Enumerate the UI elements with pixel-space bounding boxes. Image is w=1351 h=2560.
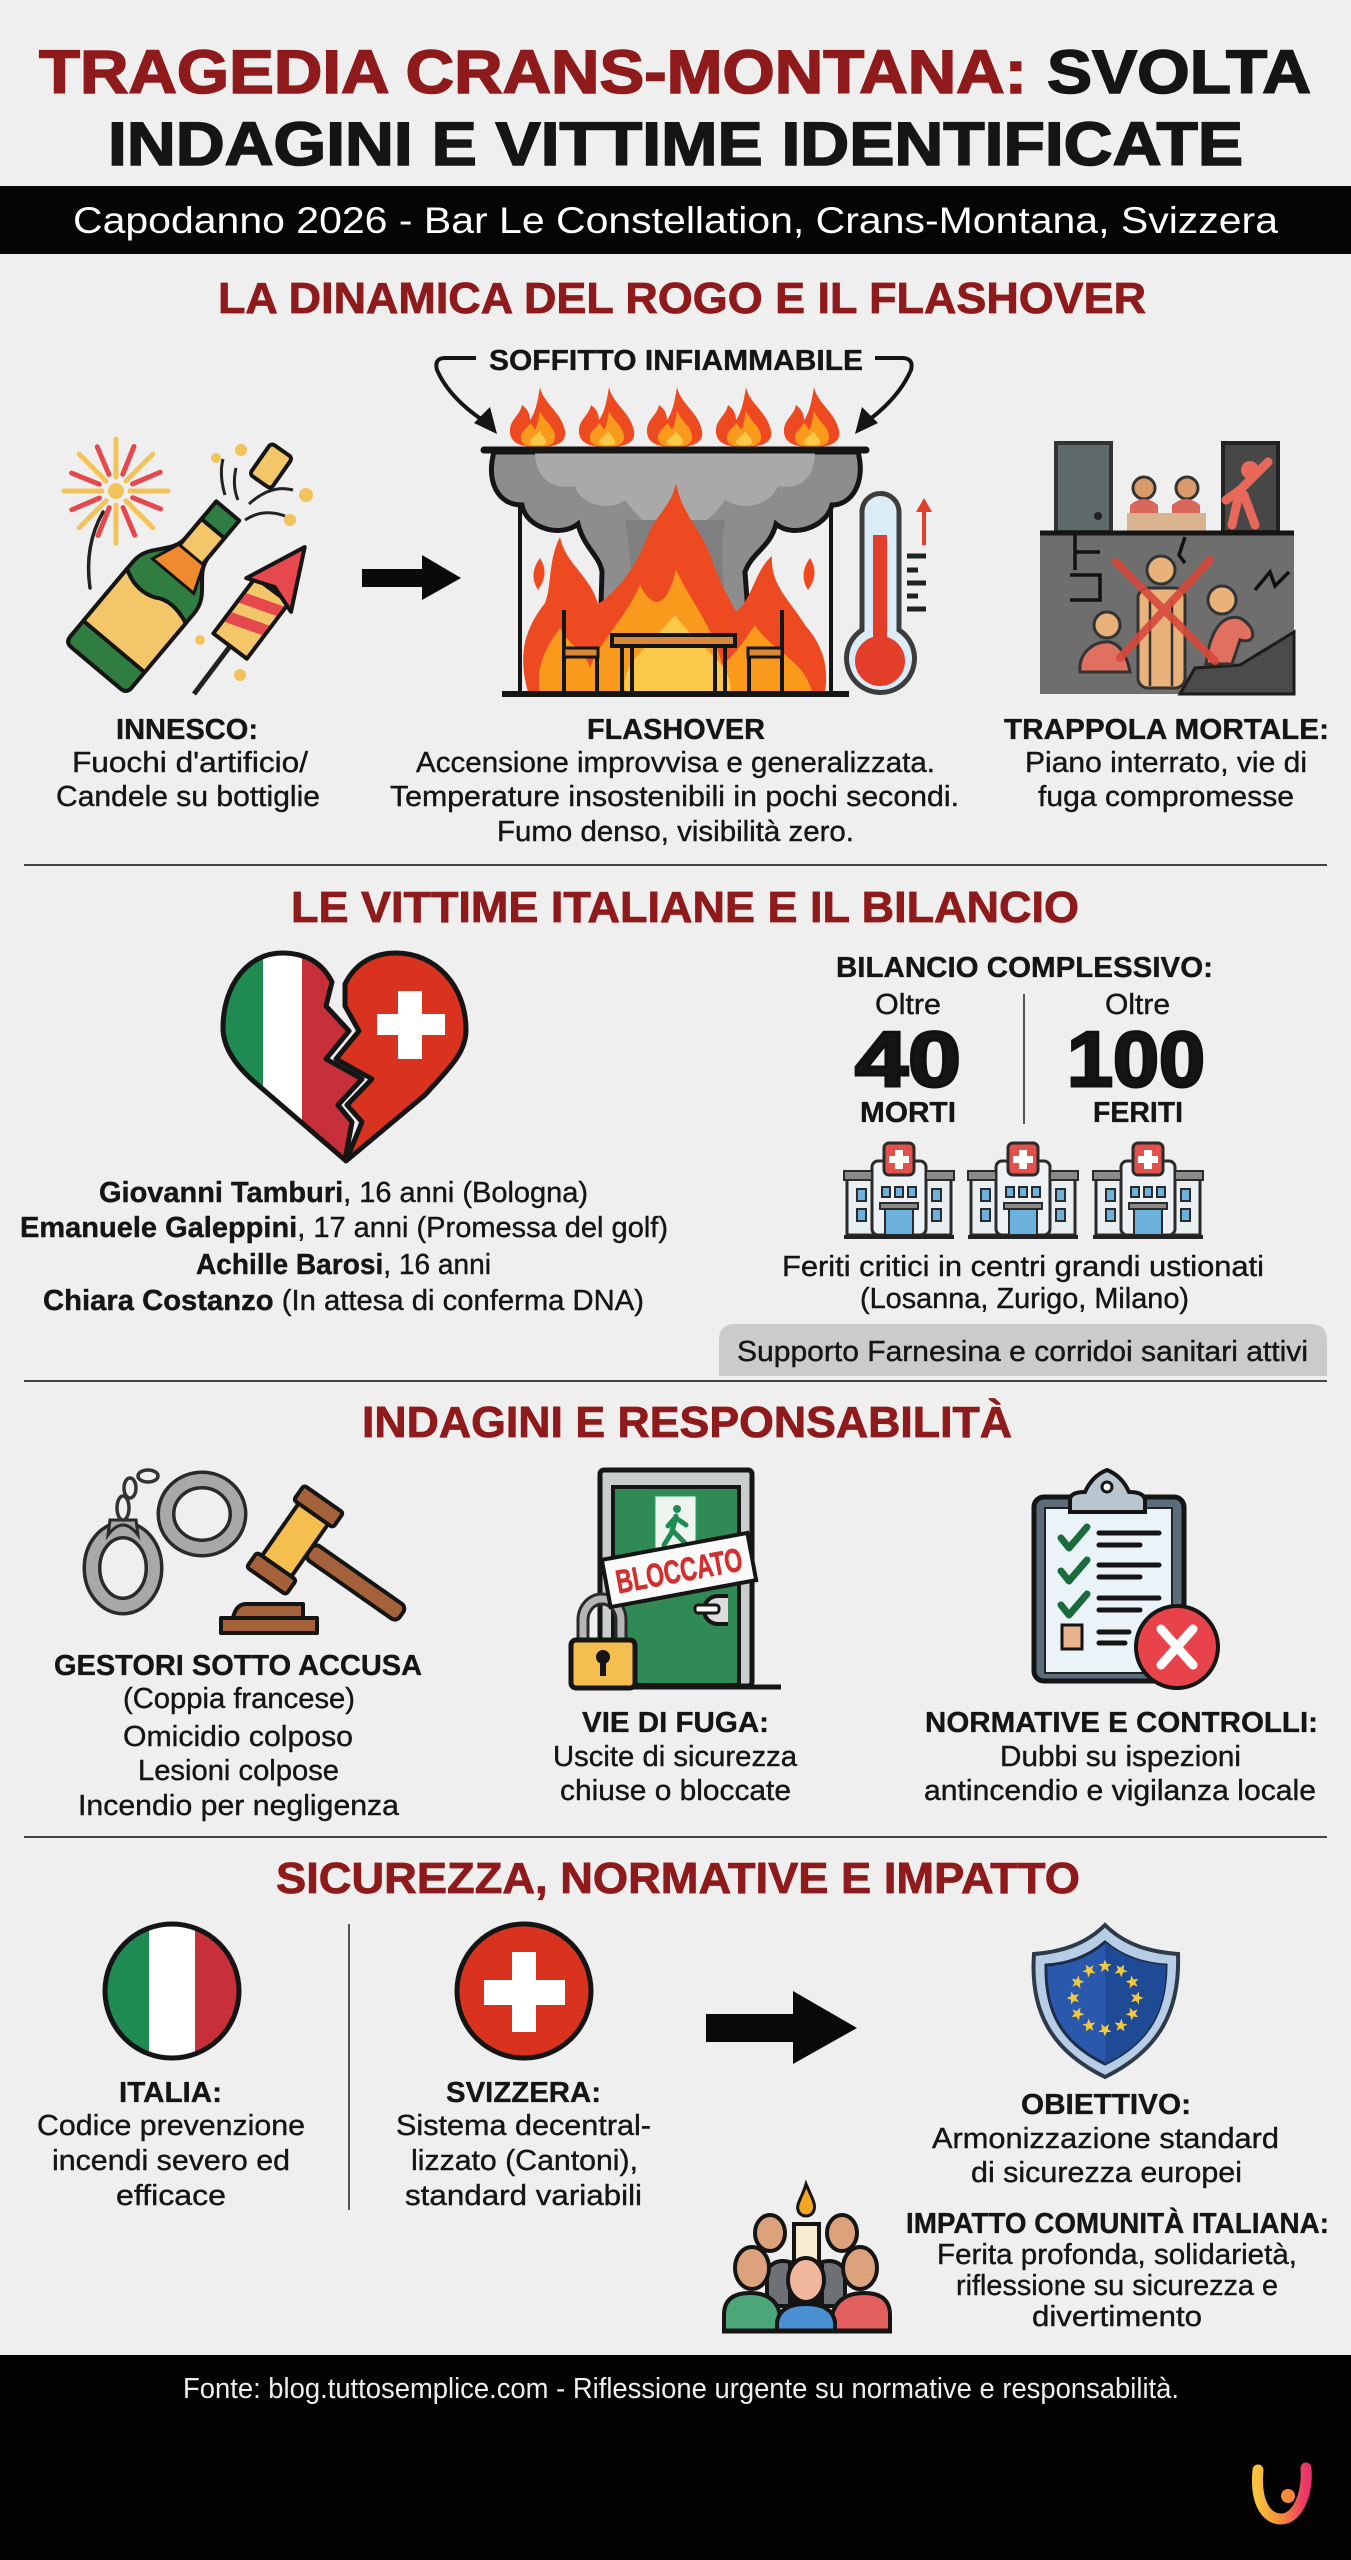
- text: burn centres: Feriti critici in centri grandi ustionati: [782, 1251, 1264, 1283]
- panel: impatto comunità italiana: [722, 2184, 1329, 2333]
- subtitle band: Capodanno 2026 - Bar Le Constellation, Crans-Montana, Svizzera: [73, 200, 1278, 241]
- label: obiettivo: [932, 2089, 1279, 2189]
- label: obiettivo: Armonizzazione standard: [932, 2123, 1279, 2155]
- label: trappola mortale: TRAPPOLA MORTALE:: [1004, 714, 1329, 746]
- label: normative e controlli: Dubbi su ispezioni: [1000, 1741, 1241, 1773]
- text: burn centres: [782, 1251, 1264, 1315]
- label: innesco: INNESCO:: [116, 714, 258, 746]
- label: impatto: [906, 2206, 1329, 2333]
- icon: handcuffs: [92, 1470, 238, 1606]
- label: vie di fuga: [553, 1707, 798, 1807]
- list: victim names: Emanuele Galeppini, 17 anni (Promessa del golf): [20, 1212, 668, 1244]
- text: burn centres: (Losanna, Zurigo, Milano): [860, 1283, 1189, 1315]
- label: vie di fuga: chiuse o bloccate: [560, 1775, 791, 1807]
- footer: [0, 2355, 1351, 2560]
- stat: 40 morti: 40: [855, 1015, 961, 1103]
- icon: big fire: [523, 483, 826, 692]
- panel: vittime italiane: [20, 945, 668, 1317]
- icon: cork: [249, 443, 293, 489]
- label: flashover: [390, 714, 959, 848]
- panel: svizzera: [396, 1924, 651, 2212]
- stat: 40 morti: MORTI: [860, 1097, 956, 1129]
- footer: Fonte: blog.tuttosemplice.com - Riflessione urgente su normative e responsabilità.: [183, 2373, 1179, 2405]
- panel: gestori: [54, 1470, 430, 1822]
- icon: ceiling flames: [510, 387, 839, 447]
- label: svizzera: [396, 2077, 651, 2212]
- icon: basement trap: [1040, 443, 1294, 694]
- icon: hospital 1: [844, 1143, 954, 1237]
- label: flashover: FLASHOVER: [587, 714, 765, 746]
- icon: italian flag circle: [105, 1924, 239, 2058]
- icon: bloccato tape: BLOCCATO: [613, 1541, 745, 1600]
- stat: 100 feriti: 100: [1067, 1015, 1205, 1103]
- label: impatto: IMPATTO COMUNITÀ ITALIANA:: [906, 2206, 1329, 2240]
- panel: flashover: [390, 345, 959, 848]
- stat: 100 feriti: FERITI: [1093, 1097, 1183, 1129]
- stat: 40 morti: [855, 989, 961, 1129]
- label: obiettivo: di sicurezza europei: [971, 2157, 1242, 2189]
- callout: farnesina: [719, 1324, 1327, 1376]
- icon: blocked door: [571, 1470, 781, 1688]
- arrow: right ceiling pointer: [855, 358, 912, 434]
- arrow: left ceiling pointer: [436, 358, 497, 434]
- label: svizzera: SVIZZERA:: [446, 2077, 601, 2109]
- icon: rocket: [172, 530, 327, 711]
- label: innesco: Candele su bottiglie: [56, 781, 320, 813]
- label: vie di fuga: VIE DI FUGA:: [582, 1707, 769, 1739]
- label: normative e controlli: antincendio e vigilanza locale: [924, 1775, 1316, 1807]
- icon: table and chairs: [564, 610, 782, 692]
- label: trappola mortale: [1004, 714, 1329, 813]
- label: flashover: Accensione improvvisa e generalizzata.: [416, 747, 935, 779]
- label: vie di fuga: Uscite di sicurezza: [553, 1741, 798, 1773]
- label: gestori sotto accusa: Lesioni colpose: [138, 1755, 339, 1787]
- label: gestori sotto accusa: Omicidio colposo: [123, 1721, 353, 1753]
- label: normative e controlli: NORMATIVE E CONTROLLI:: [925, 1707, 1318, 1739]
- label: normative e controlli: [924, 1707, 1318, 1807]
- heading: la dinamica: LA DINAMICA DEL ROGO E IL FLASHOVER: [218, 274, 1146, 323]
- stat: 40 morti: Oltre: [875, 989, 941, 1021]
- arrow: innesco to flashover: [362, 555, 461, 600]
- heading: le vittime: LE VITTIME ITALIANE E IL BILANCIO: [291, 883, 1079, 932]
- icon: gavel: [221, 1485, 430, 1656]
- icon: hospital 3: [1093, 1143, 1203, 1237]
- icon: thermometer: [847, 494, 932, 693]
- label: flashover: Fumo denso, visibilità zero.: [497, 816, 854, 848]
- label: flashover: Temperature insostenibili in pochi secondi.: [390, 781, 959, 813]
- label: trappola mortale: fuga compromesse: [1038, 781, 1294, 813]
- arrow: towards objective: [706, 1991, 857, 2064]
- label: impatto: divertimento: [1032, 2301, 1202, 2333]
- icon: swiss flag circle: [457, 1924, 591, 2058]
- icon: floor: [502, 691, 849, 697]
- icon: bloccato tape: [602, 1533, 756, 1607]
- panel: obiettivo: [932, 1925, 1279, 2189]
- panel: vie di fuga: [553, 1470, 798, 1807]
- icon: ceiling line: [484, 446, 866, 454]
- icon: smoke cloud: [492, 452, 860, 660]
- icon: EU shield: [1034, 1925, 1178, 2077]
- icon: fireworks: [64, 439, 313, 681]
- icon: logo: [1257, 2468, 1306, 2519]
- panel: innesco: [56, 439, 327, 813]
- list: victim names: Achille Barosi, 16 anni: [196, 1249, 491, 1281]
- stat: 100 feriti: [1067, 989, 1205, 1129]
- icon: room columns: [520, 500, 831, 694]
- panel: normative e controlli: [924, 1470, 1318, 1807]
- list: victim names: Giovanni Tamburi, 16 anni (Bologna): [99, 1177, 588, 1209]
- panel: bilancio complessivo: [719, 952, 1327, 1376]
- label: italia: Codice prevenzione: [37, 2110, 305, 2142]
- label: svizzera: standard variabili: [405, 2180, 642, 2212]
- stat: 100 feriti: Oltre: [1105, 989, 1170, 1021]
- list: victim names: Chiara Costanzo (In attesa di conferma DNA): [43, 1285, 644, 1317]
- list: victim names: [20, 1177, 668, 1317]
- label: impatto: riflessione su sicurezza e: [956, 2270, 1278, 2302]
- panel: trappola mortale: [1004, 443, 1329, 813]
- title: TRAGEDIA CRANS-MONTANA:: [39, 38, 1027, 106]
- label: svizzera: Sistema decentral-: [396, 2110, 651, 2142]
- label: soffitto infiammabile: SOFFITTO INFIAMMABILE: [489, 345, 863, 377]
- title: SVOLTA: [1047, 38, 1311, 106]
- label: impatto: Ferita profonda, solidarietà,: [937, 2239, 1297, 2271]
- heading: indagini: INDAGINI E RESPONSABILITÀ: [362, 1397, 1012, 1447]
- icon: mourning people with candle: [722, 2184, 892, 2331]
- icon: red x badge: [1136, 1606, 1218, 1688]
- label: obiettivo: OBIETTIVO:: [1021, 2089, 1191, 2121]
- panel: italia: [37, 1924, 305, 2212]
- label: svizzera: lizzato (Cantoni),: [411, 2145, 638, 2177]
- title: INDAGINI E VITTIME IDENTIFICATE: [108, 110, 1243, 178]
- label: italia: efficace: [116, 2180, 226, 2212]
- icon: champagne bottle: [65, 485, 258, 694]
- icon: clipboard: [1034, 1470, 1184, 1681]
- label: gestori sotto accusa: Incendio per negligenza: [78, 1790, 400, 1822]
- label: trappola mortale: Piano interrato, vie di: [1025, 747, 1307, 779]
- icon: broken heart: [215, 945, 466, 1170]
- label: gestori sotto accusa: [54, 1650, 422, 1822]
- label: gestori sotto accusa: (Coppia francese): [123, 1683, 355, 1715]
- subtitle band: [0, 186, 1351, 254]
- label: innesco: Fuochi d'artificio/: [72, 747, 309, 779]
- title: [39, 38, 1311, 178]
- label: italia: incendi severo ed: [52, 2145, 290, 2177]
- label: italia: ITALIA:: [119, 2077, 222, 2109]
- label: innesco: [56, 714, 320, 813]
- label: bilancio: BILANCIO COMPLESSIVO:: [836, 952, 1213, 984]
- callout: farnesina: Supporto Farnesina e corridoi sanitari attivi: [737, 1336, 1308, 1368]
- heading: sicurezza: SICUREZZA, NORMATIVE E IMPATTO: [276, 1854, 1080, 1903]
- label: italia: [37, 2077, 305, 2212]
- label: gestori sotto accusa: GESTORI SOTTO ACCUSA: [54, 1650, 422, 1682]
- icon: hospital 2: [968, 1143, 1078, 1237]
